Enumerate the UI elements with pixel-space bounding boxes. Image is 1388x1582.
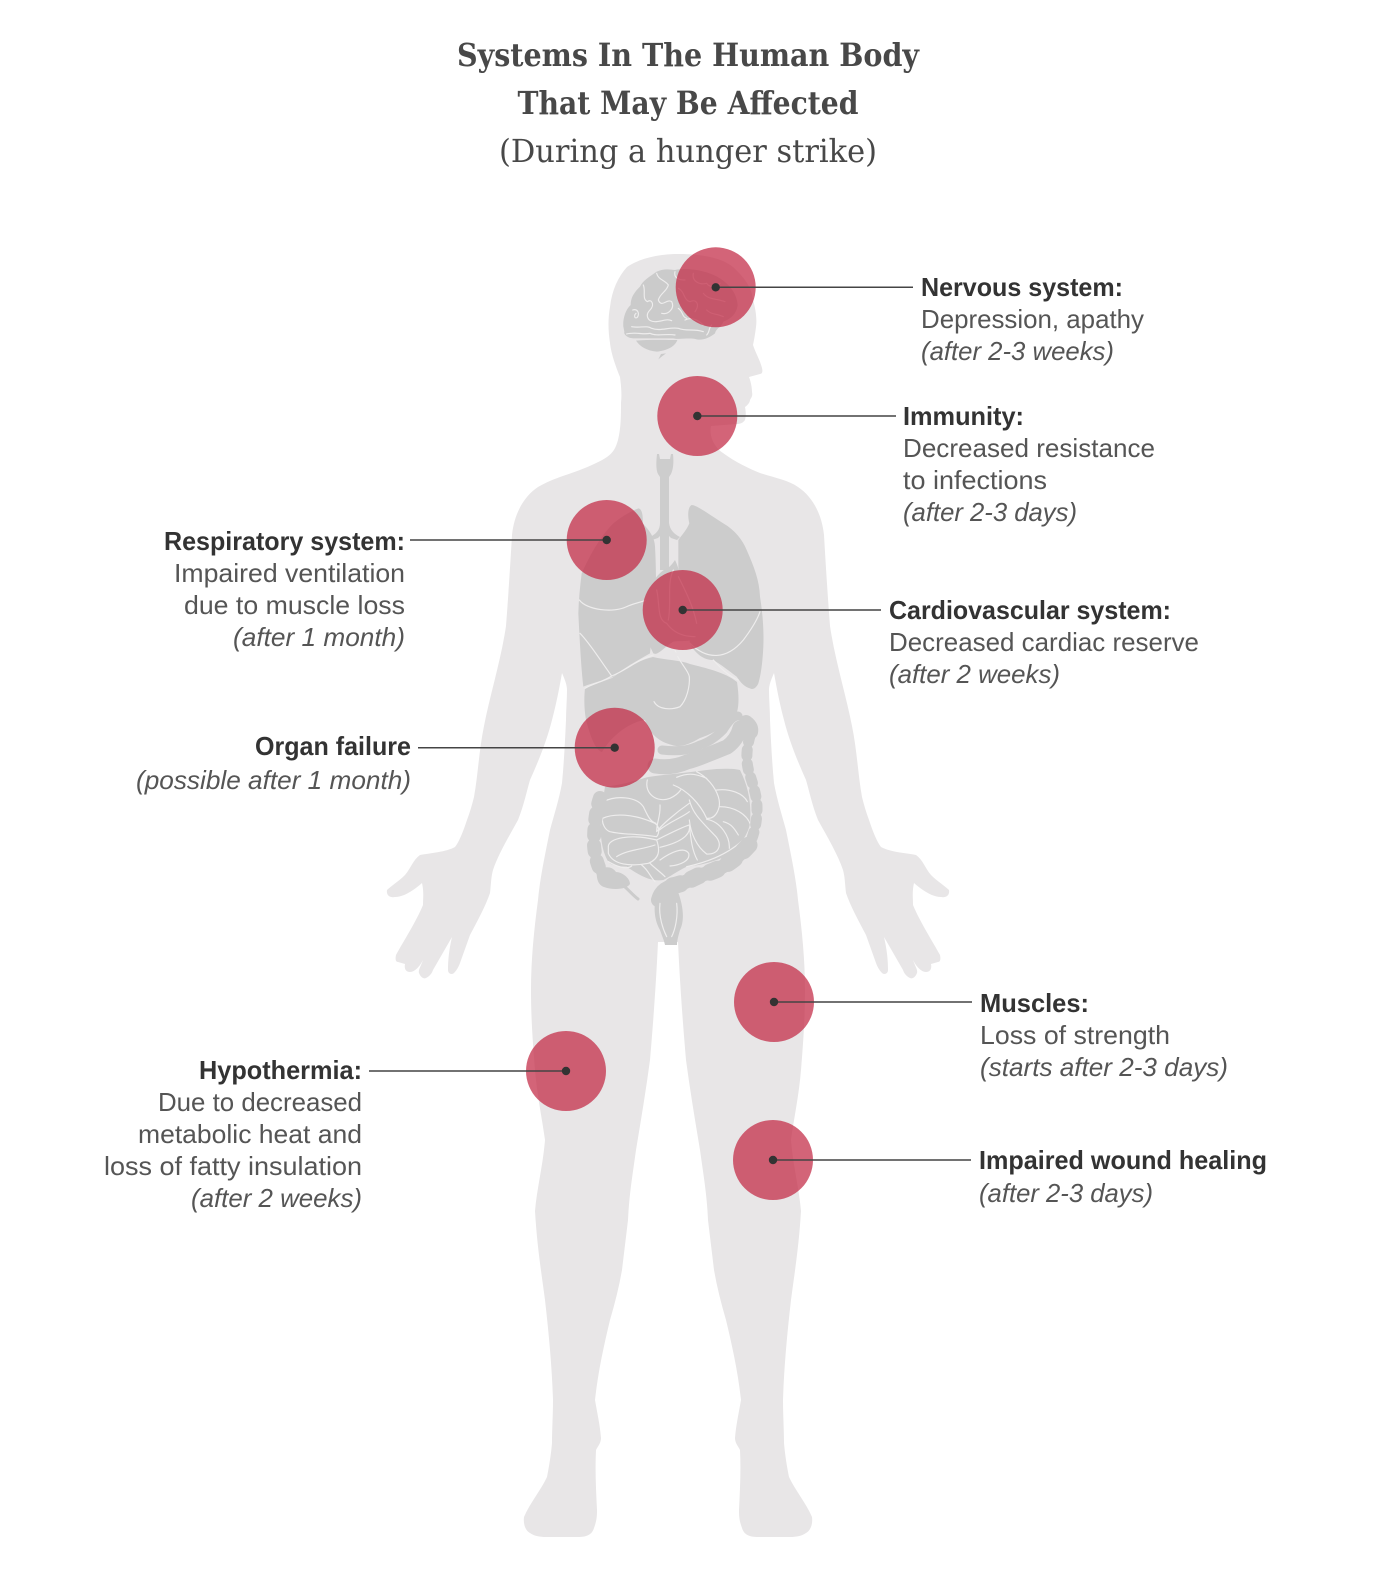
label: cardiovascular system	[889, 595, 1199, 689]
label: nervous system	[921, 272, 1144, 366]
label: immunity: (after 2-3 days)	[903, 497, 1077, 527]
title: (During a hunger strike)	[499, 132, 877, 170]
body silhouette	[387, 254, 949, 1537]
label: hypothermia	[104, 1055, 362, 1213]
label: organ failure: Organ failure	[255, 731, 411, 761]
label: muscles: (starts after 2-3 days)	[980, 1052, 1228, 1082]
label: organ failure	[136, 731, 411, 795]
label: cardiovascular system: Cardiovascular system:	[889, 595, 1171, 625]
marker: nervous system	[676, 247, 913, 327]
marker: hypothermia	[369, 1031, 606, 1111]
label: hypothermia: Hypothermia:	[199, 1055, 362, 1085]
marker: respiratory system	[410, 500, 647, 580]
label: immunity: to infections	[903, 465, 1047, 495]
brain	[623, 269, 738, 359]
label: wound healing: (after 2-3 days)	[979, 1178, 1153, 1208]
label: nervous system: (after 2-3 weeks)	[921, 336, 1114, 366]
marker: organ failure	[418, 708, 655, 788]
marker: muscles	[734, 962, 972, 1042]
label: respiratory system: Respiratory system:	[164, 526, 405, 556]
label: wound healing: Impaired wound healing	[979, 1145, 1267, 1175]
label: hypothermia: metabolic heat and	[138, 1119, 362, 1149]
label: cardiovascular system: Decreased cardiac reserve	[889, 627, 1199, 657]
label: hypothermia: (after 2 weeks)	[191, 1183, 362, 1213]
label: nervous system: Nervous system:	[921, 272, 1123, 302]
label: muscles: Loss of strength	[980, 1020, 1170, 1050]
title: Systems In The Human Body	[457, 36, 920, 74]
organs: heart	[644, 560, 699, 662]
label: respiratory system: (after 1 month)	[233, 622, 405, 652]
organs: trachea and bronchi	[650, 454, 680, 570]
label: muscles: Muscles:	[980, 988, 1089, 1018]
title: That May Be Affected	[518, 84, 858, 122]
label: cardiovascular system: (after 2 weeks)	[889, 659, 1060, 689]
marker: cardiovascular system	[643, 570, 881, 650]
organs: intestines	[594, 716, 757, 945]
label: immunity: Immunity:	[903, 401, 1024, 431]
marker: wound healing	[733, 1120, 971, 1200]
label: respiratory system: Impaired ventilation	[174, 558, 405, 588]
label: muscles	[980, 988, 1228, 1082]
label: respiratory system: due to muscle loss	[184, 590, 405, 620]
label: immunity	[903, 401, 1155, 527]
label: wound healing	[979, 1145, 1267, 1208]
label: organ failure: (possible after 1 month)	[136, 765, 411, 795]
label: hypothermia: loss of fatty insulation	[104, 1151, 362, 1181]
label: nervous system: Depression, apathy	[921, 304, 1144, 334]
label: immunity: Decreased resistance	[903, 433, 1155, 463]
marker: immunity	[657, 376, 896, 456]
label: respiratory system	[164, 526, 405, 652]
organs: liver and stomach	[584, 650, 738, 752]
title	[457, 36, 920, 170]
organs: lungs	[578, 505, 764, 689]
label: hypothermia: Due to decreased	[158, 1087, 362, 1117]
